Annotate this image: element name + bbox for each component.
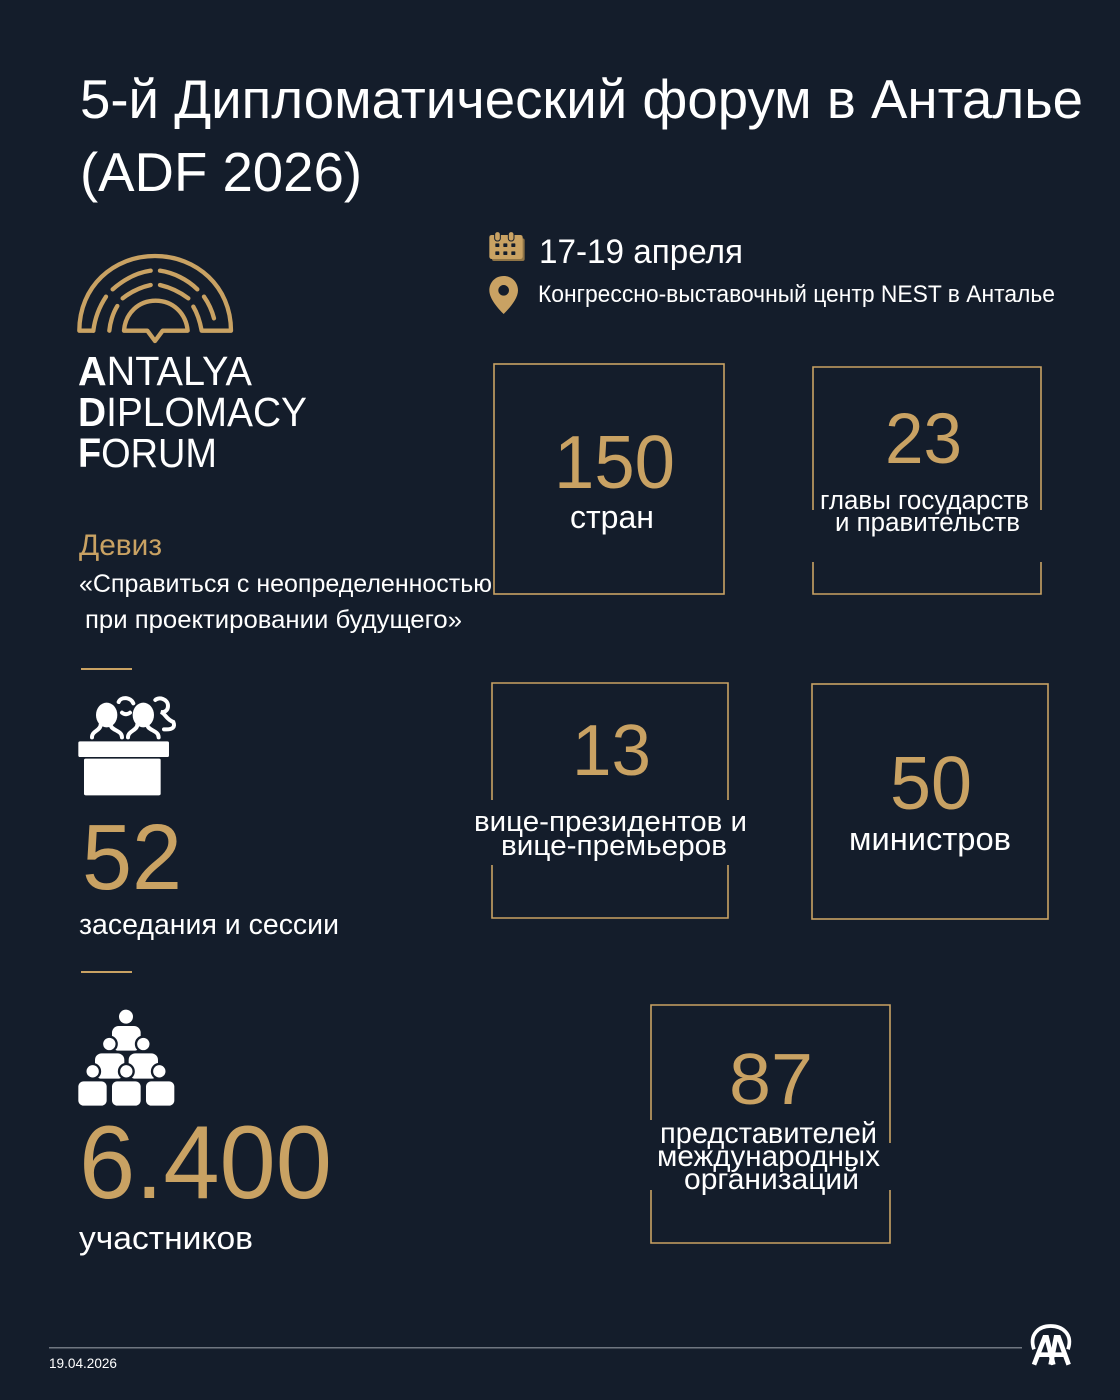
date and venue: Конгрессно-выставочный центр NEST в Анталье bbox=[538, 281, 1055, 308]
stat box: 150 countries: 150 bbox=[554, 420, 675, 504]
stat box: 23 heads of state: и правительств bbox=[835, 507, 1020, 537]
motto: «Справиться с неопределенностью bbox=[79, 570, 492, 598]
stat box: 13 vice presidents: вице-президентов и bbox=[474, 806, 747, 838]
icon: pyramid of people bbox=[78, 1010, 174, 1106]
stat box: 23 heads of state: 23 bbox=[885, 400, 962, 479]
logo: Antalya Diplomacy Forum: ANTALYA bbox=[78, 348, 253, 394]
stat box: 87 international organisations: международных bbox=[657, 1140, 880, 1173]
stat box: 13 vice presidents: 13 bbox=[572, 711, 651, 791]
footer bbox=[49, 1326, 1069, 1371]
stat: 52 sessions bbox=[78, 698, 339, 941]
stat box: 13 vice presidents: вице-премьеров bbox=[501, 830, 727, 862]
stat: 6400 participants: 6.400 bbox=[79, 1105, 332, 1221]
motto bbox=[79, 529, 492, 634]
title: (ADF 2026) bbox=[80, 141, 362, 203]
stat box: 23 heads of state bbox=[813, 367, 1041, 594]
title: 5-й Дипломатический форум в Анталье bbox=[80, 68, 1083, 130]
stat box: 150 countries bbox=[494, 364, 724, 594]
icon: location pin bbox=[489, 276, 518, 314]
stat box: 50 ministers bbox=[812, 684, 1048, 919]
stat box: 50 ministers: министров bbox=[849, 821, 1011, 857]
motto: Девиз bbox=[79, 529, 162, 562]
stat box: 87 international organisations: 87 bbox=[729, 1040, 813, 1120]
footer: 19.04.2026 bbox=[49, 1355, 117, 1371]
icon: gold amphitheatre arch bbox=[79, 256, 231, 341]
motto: при проектировании будущего» bbox=[85, 606, 462, 634]
icon: podium with speakers bbox=[78, 698, 174, 795]
stat: 52 sessions: заседания и сессии bbox=[79, 909, 339, 941]
stat box: 50 ministers: 50 bbox=[890, 741, 972, 825]
date and venue: 17-19 апреля bbox=[539, 233, 743, 271]
logo: Antalya Diplomacy Forum: FORUM bbox=[78, 430, 217, 476]
title bbox=[80, 68, 1083, 203]
stat box: 23 heads of state: главы государств bbox=[820, 485, 1029, 515]
stat box: 87 international organisations: представителей bbox=[660, 1117, 877, 1150]
stat: 52 sessions: 52 bbox=[82, 805, 182, 909]
logo: Antalya Diplomacy Forum: DIPLOMACY bbox=[78, 389, 307, 435]
stat: 6400 participants bbox=[78, 1010, 332, 1256]
logo: Antalya Diplomacy Forum bbox=[78, 256, 307, 476]
stat: 6400 participants: участников bbox=[79, 1220, 253, 1256]
date and venue bbox=[489, 232, 1055, 314]
stat box: 87 international organisations bbox=[651, 1005, 890, 1243]
icon: calendar bbox=[489, 232, 525, 261]
stat box: 150 countries: стран bbox=[570, 499, 654, 535]
stat box: 13 vice presidents bbox=[474, 683, 747, 918]
stat box: 87 international organisations: организаций bbox=[684, 1163, 859, 1196]
icon: AA agency logo bbox=[1033, 1326, 1069, 1365]
